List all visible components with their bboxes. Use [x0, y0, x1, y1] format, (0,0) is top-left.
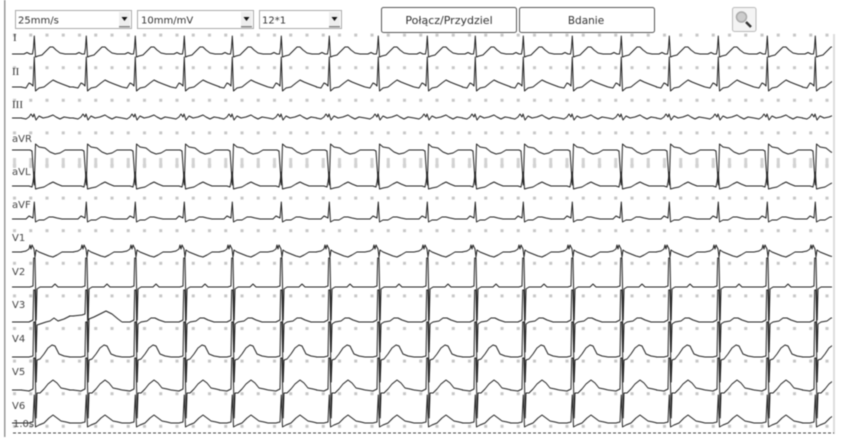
trace: lead III [12, 114, 842, 120]
gain dropdown: 10mm/mV [141, 16, 193, 26]
lead labels: V4 [12, 334, 25, 345]
trace: lead I [12, 36, 842, 57]
lead labels: aVF [12, 200, 31, 211]
trace: lead aVR [12, 144, 842, 185]
button: Połącz/Przydziel: Połącz/Przydziel [405, 14, 493, 27]
speed dropdown [16, 10, 132, 28]
right frame line [833, 34, 835, 434]
layout dropdown: 12*1 [262, 16, 286, 26]
speed dropdown: 25mm/s [18, 16, 59, 26]
trace: lead aVF [12, 202, 842, 222]
gain dropdown [138, 10, 254, 28]
lead labels: aVR [12, 134, 32, 145]
lead labels: V3 [12, 300, 25, 311]
trace: lead V5 [12, 358, 842, 418]
lead labels: III [12, 99, 23, 111]
lead labels: V1 [12, 233, 25, 244]
trace: lead V3 [12, 290, 842, 352]
trace: lead aVL [12, 172, 842, 189]
left frame line [4, 0, 6, 437]
lead labels [12, 32, 34, 430]
button: Badanie: Bdanie [568, 15, 604, 27]
lead labels: II [12, 66, 20, 78]
trace: lead V1 [12, 245, 842, 257]
lead labels: V5 [12, 367, 25, 378]
button: Badanie [520, 8, 654, 32]
trace: lead V2 [12, 258, 842, 320]
lead labels: V6 [12, 401, 25, 412]
lead labels: aVL [12, 167, 31, 178]
trace: lead V6 [12, 395, 842, 427]
tall grid dots row [12, 158, 834, 168]
time axis dashed line [13, 432, 834, 434]
icon: magnifier [732, 8, 756, 32]
layout dropdown [260, 10, 342, 28]
lead labels: 1.0s [13, 419, 34, 430]
lead labels: V2 [12, 267, 25, 278]
trace: lead II [12, 57, 842, 91]
lead labels: I [13, 32, 17, 44]
button: Połącz/Przydziel [382, 8, 516, 32]
trace: lead V4 [12, 322, 842, 382]
